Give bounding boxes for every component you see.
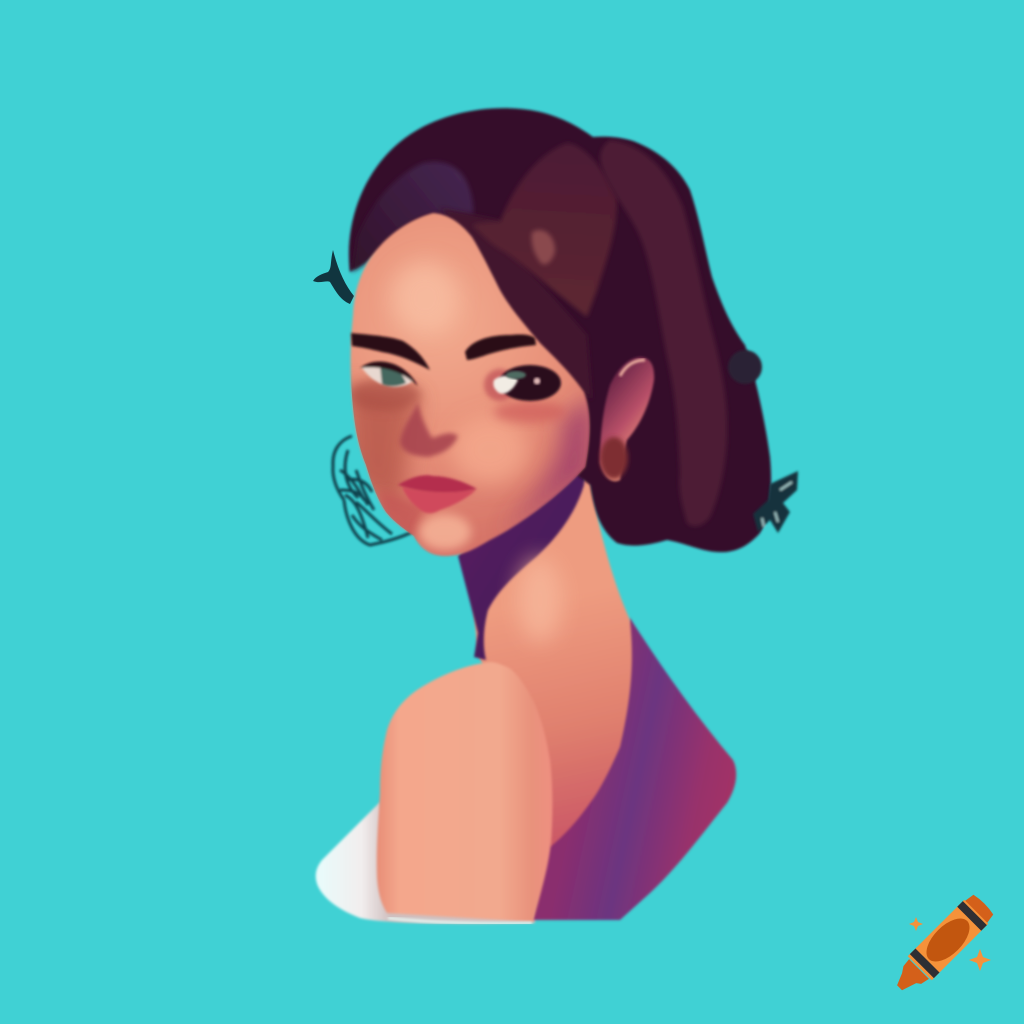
forehead highlight xyxy=(391,262,459,334)
arm xyxy=(377,662,552,922)
face xyxy=(351,213,589,556)
earring: left floral hoop xyxy=(333,436,412,545)
earring: right stud xyxy=(600,437,628,479)
ear xyxy=(600,357,654,481)
hair back mass xyxy=(349,108,771,552)
crayon cap xyxy=(963,892,996,925)
back in purple shadow xyxy=(532,618,736,920)
neck shadow xyxy=(458,460,586,660)
right cheek light xyxy=(452,416,528,484)
right eye xyxy=(484,365,561,401)
left cheek shadow xyxy=(345,385,420,510)
left eye socket shadow xyxy=(349,379,421,411)
chin highlight xyxy=(419,514,471,550)
right eyebrow xyxy=(465,334,536,360)
smoky socket xyxy=(499,365,561,401)
sparkle large xyxy=(969,949,991,971)
right side magenta shading xyxy=(510,394,590,524)
under eye blush xyxy=(494,401,566,423)
hair front lighter panel xyxy=(472,143,617,317)
neck and upper back xyxy=(470,475,632,847)
icon: crayon logo xyxy=(888,892,996,1000)
garment strip below arm xyxy=(388,918,532,923)
left eye xyxy=(360,362,418,387)
ear rim xyxy=(620,360,645,376)
illustration: portrait of a woman on teal background xyxy=(313,106,994,990)
eye socket tint xyxy=(484,369,516,401)
hair bun ornament xyxy=(728,350,762,384)
neck highlight xyxy=(518,558,562,642)
face shading xyxy=(345,262,595,550)
hair highlight spot xyxy=(532,230,555,264)
nose xyxy=(400,402,458,457)
hair accessory: left leaf xyxy=(313,250,354,304)
jaw shadow under lips xyxy=(380,490,425,545)
white garment xyxy=(316,802,535,924)
lips xyxy=(398,475,477,513)
hair crown sheen xyxy=(352,162,473,272)
hair right lighter strand xyxy=(600,140,727,526)
sparkle small xyxy=(909,917,923,931)
left eyebrow xyxy=(351,333,430,370)
hair accessory: right bow xyxy=(753,471,798,533)
hair fringe over forehead side xyxy=(440,208,592,400)
